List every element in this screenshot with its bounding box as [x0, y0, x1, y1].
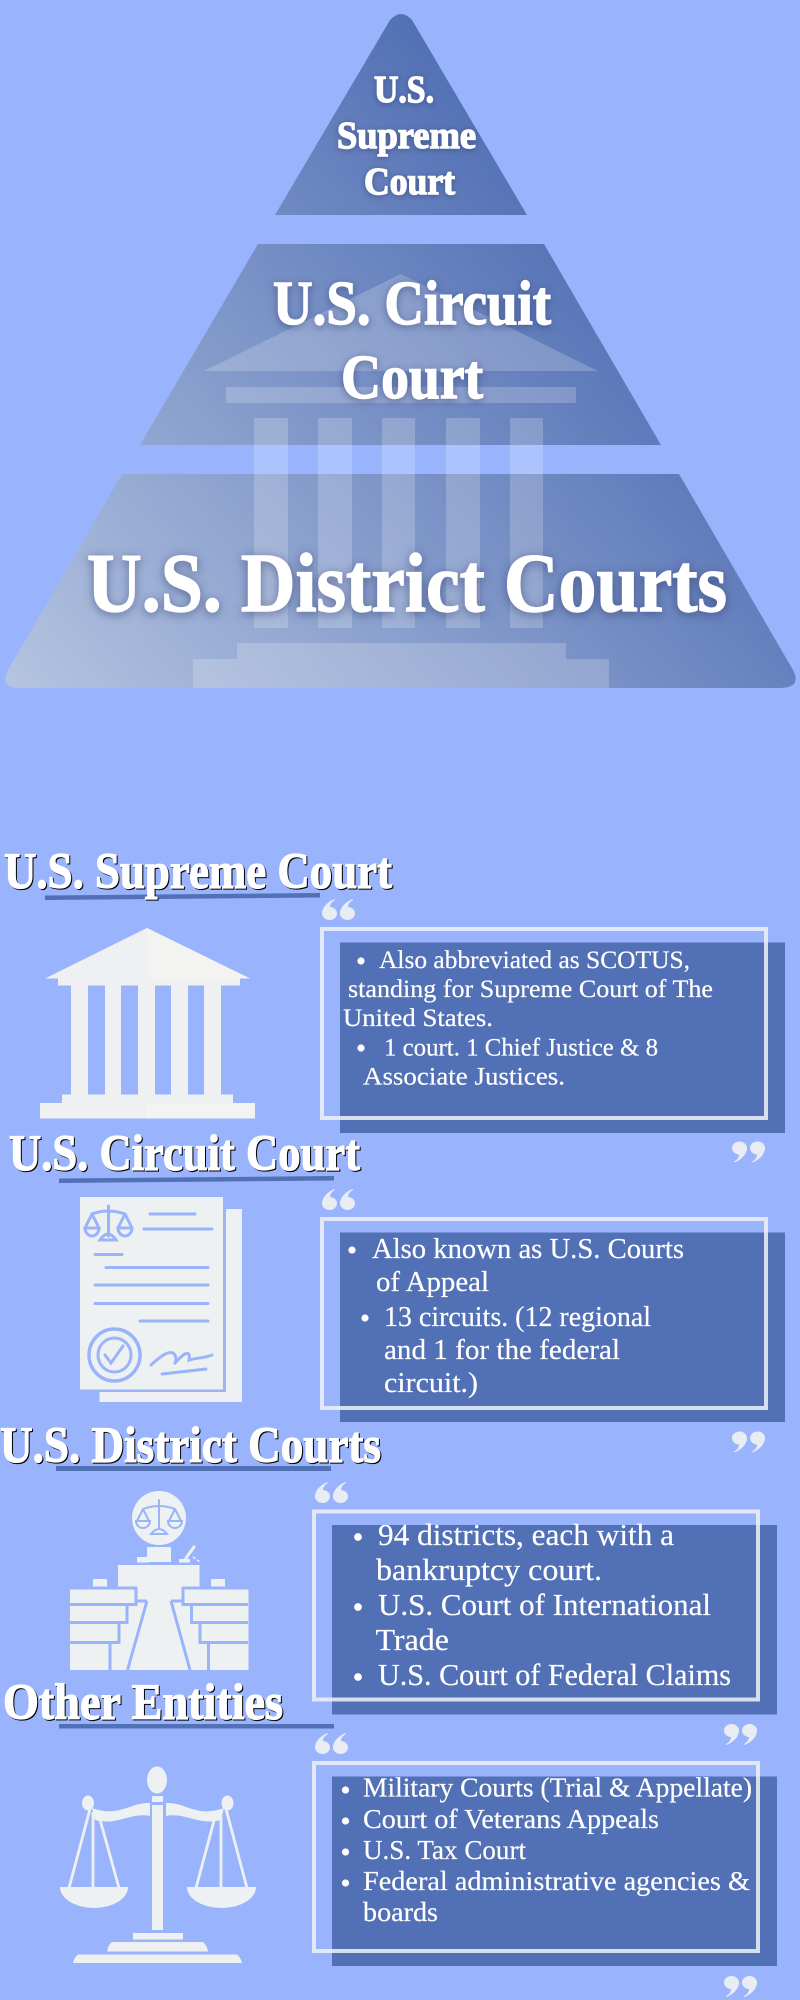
pyramid label: supreme court: U.S.: [374, 69, 434, 111]
panel text: United States.: [343, 1005, 493, 1032]
pyramid label: supreme court: Court: [364, 161, 455, 203]
icon: courthouse: [40, 928, 255, 1118]
text panel: dark box: [332, 1776, 777, 1966]
heading underline: [56, 1466, 331, 1471]
text panel: outline: [322, 1219, 766, 1408]
quote mark: close: [724, 1724, 757, 1745]
pyramid label: supreme court: Supreme: [337, 115, 476, 157]
heading: Other Entities: Other Entities: [3, 1675, 283, 1731]
panel text: [342, 1772, 752, 1927]
panel text: [348, 1233, 684, 1399]
pyramid tier: circuit court: [140, 244, 661, 445]
text panel: outline: [322, 929, 766, 1118]
heading: U.S. Circuit Court: U.S. Circuit Court: [9, 1126, 360, 1182]
section: district courts: [0, 1418, 777, 1745]
panel text: Also abbreviated as SCOTUS,: [379, 947, 690, 974]
quote mark: close: [732, 1142, 765, 1162]
pyramid label: circuit court: U.S. Circuit: [273, 270, 551, 338]
panel text: Trade: [376, 1622, 449, 1657]
quote mark: open: [322, 899, 355, 920]
pyramid label: district courts: U.S. District Courts: [87, 537, 727, 630]
panel text: Court of Veterans Appeals: [363, 1804, 659, 1834]
icon: balance scale: [60, 1766, 256, 1963]
panel text: of Appeal: [376, 1266, 489, 1298]
panel text: U.S. Court of Federal Claims: [378, 1657, 731, 1692]
quote mark: close: [724, 1976, 757, 1997]
panel text: circuit.): [384, 1367, 478, 1399]
panel text: U.S. Court of International: [378, 1587, 711, 1622]
heading underline: [45, 893, 320, 900]
panel text: bankruptcy court.: [376, 1552, 602, 1587]
section: supreme court: [4, 844, 785, 1162]
heading: U.S. District Courts: U.S. District Courts: [0, 1418, 381, 1474]
heading underline: [59, 1176, 334, 1183]
pyramid diagram: [5, 14, 796, 688]
panel text: standing for Supreme Court of The: [348, 976, 713, 1003]
courthouse watermark: [193, 274, 609, 688]
heading: U.S. Supreme Court: U.S. Supreme Court: [4, 844, 392, 900]
heading underline: [59, 1724, 334, 1728]
panel text: [343, 947, 713, 1090]
quote mark: open: [322, 1189, 355, 1210]
text panel: outline: [314, 1512, 758, 1700]
pyramid tier: district courts: [5, 474, 796, 688]
section: circuit court: [9, 1126, 785, 1452]
panel text: Also known as U.S. Courts: [372, 1233, 684, 1265]
section: other entities: [3, 1675, 777, 1997]
text panel: dark box: [340, 942, 785, 1133]
panel text: U.S. Tax Court: [363, 1835, 526, 1865]
panel text: boards: [363, 1897, 438, 1927]
pyramid label: circuit court: Court: [341, 344, 483, 412]
text panel: dark box: [340, 1232, 785, 1422]
pyramid tier: supreme court: [275, 14, 527, 215]
icon: courtroom with judge bench: [70, 1491, 248, 1670]
text panel: outline: [314, 1763, 758, 1951]
quote mark: close: [732, 1432, 765, 1452]
panel text: [354, 1517, 731, 1692]
panel text: and 1 for the federal: [384, 1334, 620, 1366]
quote mark: open: [315, 1482, 348, 1503]
panel text: 13 circuits. (12 regional: [384, 1301, 651, 1333]
panel text: Federal administrative agencies &: [363, 1866, 750, 1896]
quote mark: open: [315, 1733, 348, 1754]
panel text: Military Courts (Trial & Appellate): [363, 1772, 752, 1802]
panel text: Associate Justices.: [363, 1064, 565, 1090]
text panel: dark box: [332, 1525, 777, 1714]
panel text: 1 court. 1 Chief Justice & 8: [384, 1034, 658, 1062]
panel text: 94 districts, each with a: [378, 1517, 674, 1552]
pyramid label: circuit court: [273, 270, 551, 412]
icon: legal document: [80, 1197, 242, 1402]
pyramid label: supreme court: [337, 69, 476, 203]
